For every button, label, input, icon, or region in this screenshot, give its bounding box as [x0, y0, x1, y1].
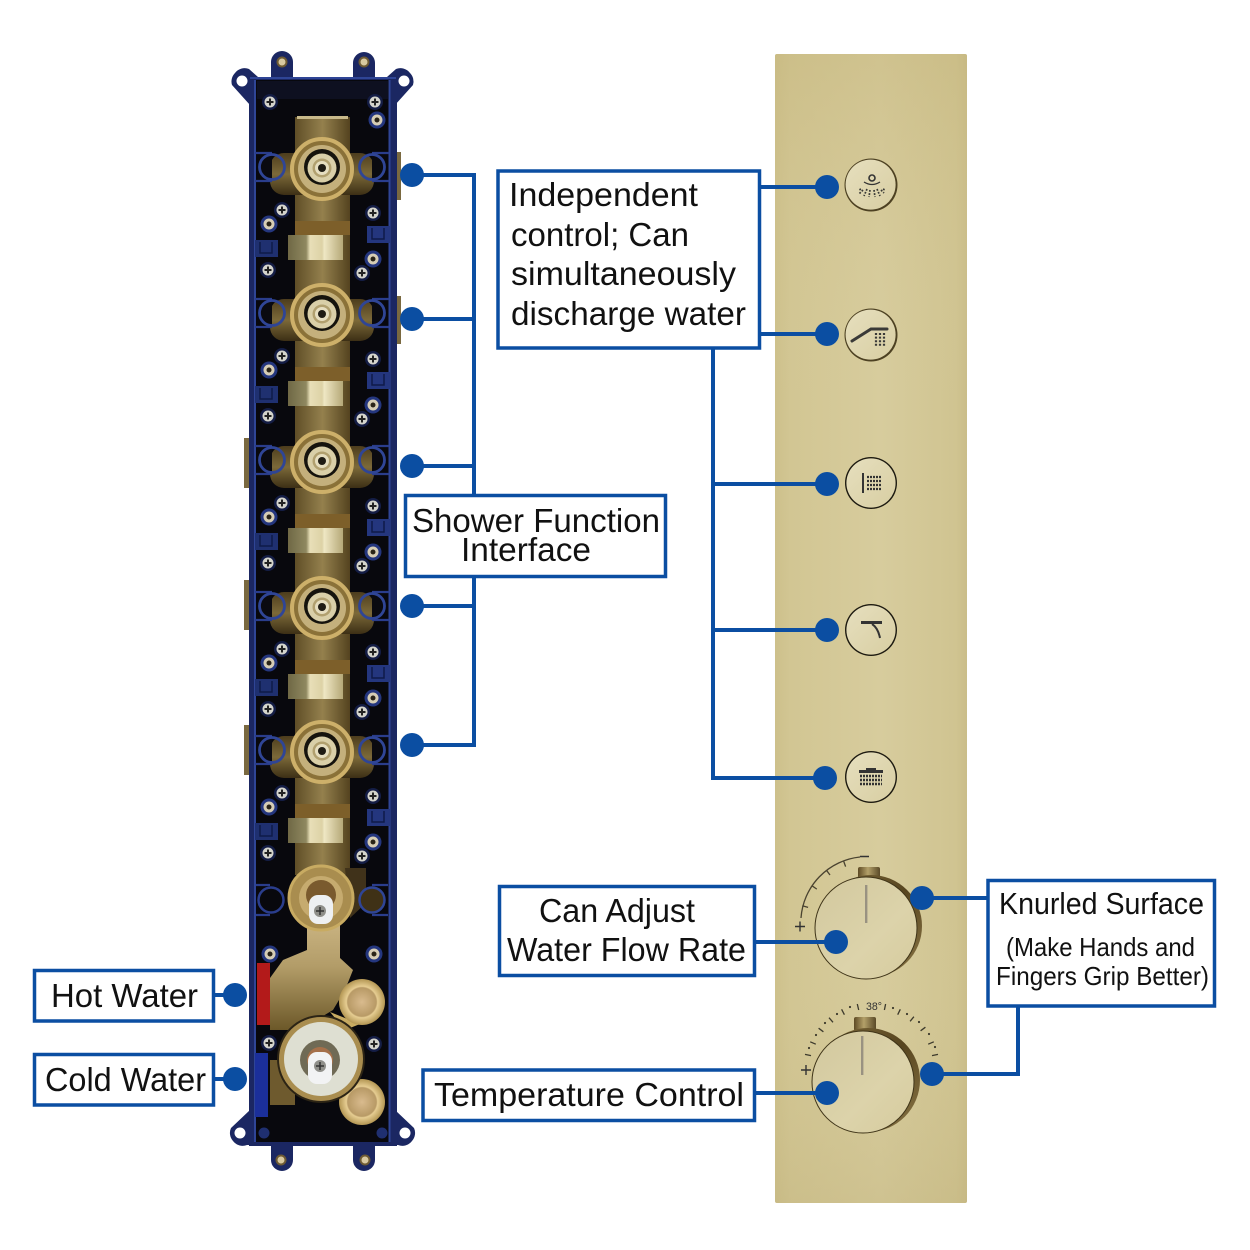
blue cold-water inlet	[255, 1053, 268, 1117]
cartridge valve	[289, 866, 353, 930]
brass valve segments	[255, 94, 390, 875]
button: body jets	[845, 457, 897, 509]
label: Cold Water	[34, 1054, 214, 1105]
label: Cold Water: Cold Water	[45, 1061, 206, 1098]
callout connector: cold water	[214, 1067, 247, 1091]
callout connector: hot water	[214, 983, 247, 1007]
side brass nubs	[244, 152, 401, 775]
label: Shower Function Interface	[406, 496, 666, 576]
lower mixing valve body	[255, 866, 388, 1138]
label: Temperature Control: Temperature Control	[434, 1076, 744, 1113]
small brass cap lower	[339, 1079, 385, 1125]
red hot-water inlet	[257, 963, 270, 1025]
label: Knurled Surface	[988, 880, 1214, 1006]
label: Independent control	[498, 171, 760, 348]
callout connector: water flow rate	[755, 930, 848, 954]
mounting tabs	[230, 51, 415, 1171]
small brass cap upper	[330, 1012, 360, 1030]
scale ticks and temperature mark: 38°	[866, 1001, 882, 1013]
label: Independent control: simultaneously	[511, 255, 737, 292]
label: Can Adjust Water Flow Rate	[500, 886, 754, 976]
label: Can Adjust Water Flow Rate: Can Adjust	[539, 892, 695, 929]
temperature knob and scale	[801, 1001, 938, 1133]
label: Hot Water	[34, 970, 214, 1021]
brushed gold shower panel	[775, 54, 967, 1203]
label: Independent control: control; Can	[511, 216, 689, 253]
callout connector: knurled surface	[910, 886, 1018, 1086]
button: tub spout	[845, 604, 897, 656]
label: Hot Water: Hot Water	[51, 977, 198, 1014]
button: hand shower	[844, 308, 898, 362]
large mixing cartridge	[278, 1016, 364, 1102]
button: overhead spray	[844, 158, 898, 212]
flow-rate knob and scale	[795, 856, 922, 979]
valve housing: concealed rough-in body	[230, 51, 415, 1171]
label: Shower Function Interface: Interface	[461, 531, 591, 568]
callout connector: independent control	[713, 175, 839, 790]
label: Temperature Control	[423, 1070, 754, 1120]
label: Knurled Surface: (Make Hands and	[1006, 932, 1195, 962]
callout connector: temperature control	[755, 1081, 839, 1105]
label: Knurled Surface: Knurled Surface	[999, 886, 1204, 921]
label: Knurled Surface: Fingers Grip Better)	[996, 961, 1209, 991]
label: Independent control: discharge water	[511, 295, 746, 332]
label: Independent control: Independent	[509, 176, 698, 213]
callout connector: shower function interface	[400, 163, 474, 757]
label: Shower Function Interface: Shower Function	[412, 502, 660, 539]
button: rain head	[845, 751, 897, 803]
label: Can Adjust Water Flow Rate: Water Flow Rate	[507, 931, 746, 968]
